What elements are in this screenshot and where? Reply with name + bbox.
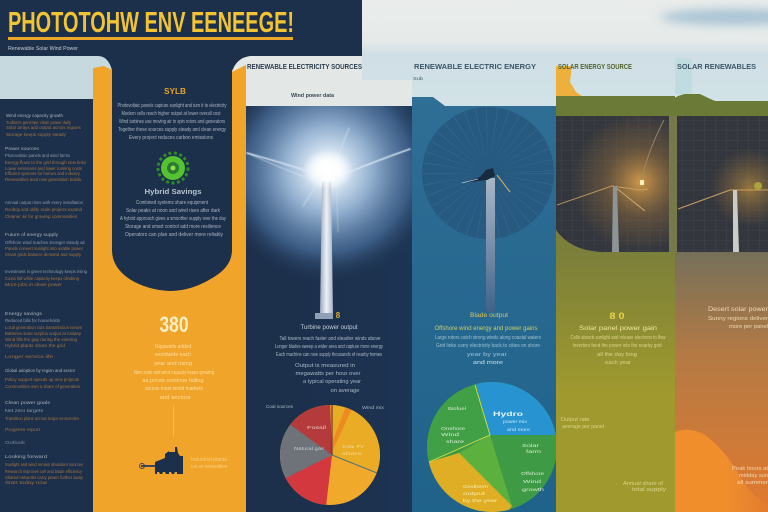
subtitle: Renewable Solar Wind Power <box>8 46 78 52</box>
pie labels <box>441 406 545 503</box>
panel: left text column: Longer service life <box>5 354 54 359</box>
panel: left text column: Energy flows to the grid through new links <box>5 160 87 165</box>
lamp <box>640 180 644 185</box>
pie labels: Wind <box>441 432 460 437</box>
panel: left text column: Photovoltaic panels and wind farms <box>5 153 71 158</box>
text block: blue panel stats <box>434 313 541 366</box>
text block: blue panel stats: Blade output <box>470 313 508 319</box>
panel: left text column: Storage keeps supply steady <box>6 132 67 137</box>
connector line <box>172 405 174 436</box>
pie labels <box>266 404 385 456</box>
text block: solar right stats: Desert solar power <box>708 307 768 313</box>
pie labels: Biofuel <box>448 406 466 411</box>
text block: statistic detail: Gigawatts added <box>155 344 191 350</box>
text block: card lower <box>120 200 226 238</box>
panel: left text column: Lower emissions and lower running costs <box>5 166 83 171</box>
panel: left text column: Turbines generate clean power daily <box>6 120 72 125</box>
text block: statistic detail <box>134 344 214 401</box>
cables <box>678 190 768 209</box>
panel: solar field <box>556 58 768 512</box>
pie labels: power mix <box>503 419 528 424</box>
text block: solar left stats: total supply <box>632 487 667 493</box>
panel: left text column: Local generation cuts transmission losses <box>5 325 83 330</box>
tower <box>486 178 495 312</box>
heading: blue panel: RENEWABLE ELECTRIC ENERGY <box>414 64 536 71</box>
panel: left text column: Energy savings <box>5 311 43 316</box>
pie labels: Geotherm <box>463 484 488 489</box>
panel: wind turbine glow <box>246 106 412 512</box>
slice: blue <box>475 380 560 435</box>
panel: left text column: Power sources <box>5 146 40 151</box>
panel: left text column: Progress report <box>5 427 41 432</box>
text block: card lower: Storage and smart control add more resilience <box>125 224 221 230</box>
panel: left text column: Batteries store surplus output at midday <box>5 331 82 336</box>
text block: statistic detail: as prices continue falling <box>142 378 204 384</box>
sky backdrop <box>362 0 768 110</box>
text block: solar right stats <box>708 307 768 486</box>
accent: orange streak <box>333 408 352 450</box>
text block: turbine stats: megawatts per hour over <box>296 371 361 377</box>
text block: card intro: Together these sources supply steady and clean energy <box>118 127 226 133</box>
rotor disc <box>422 107 554 239</box>
pie labels: by the year <box>463 498 498 503</box>
pie labels: Coal sources <box>266 404 294 409</box>
pie labels: Wind <box>523 479 542 484</box>
heading: pale header: RENEWABLE ELECTRICITY SOURCES <box>247 64 362 71</box>
subheading: blue panel: Sub <box>413 76 424 81</box>
text block: statistic detail: worldwide each <box>155 352 191 358</box>
solar array left <box>556 116 669 252</box>
text block: card lower: Solar peaks at noon and wind rises after dark <box>126 208 220 214</box>
panel: left text column <box>5 113 88 485</box>
text block: blue panel stats: year by year <box>467 352 507 358</box>
panel: left text column: Shared networks carry power further away <box>5 475 84 480</box>
text block: solar right stats: more per panel <box>729 324 768 330</box>
panel: pale header <box>232 56 412 106</box>
text block: factory caption: run on renewables <box>191 464 227 470</box>
panel: left text column: Rooftop and utility scale projects expand <box>5 207 83 212</box>
heading: solar left: SOLAR ENERGY SOURCE <box>558 64 632 71</box>
orange sky patch <box>556 66 582 96</box>
turbine tower <box>320 182 333 314</box>
panel: left text column: Efficient systems for homes and industry <box>5 171 81 176</box>
panel: left text column: Transition plans across major economies <box>5 416 80 421</box>
statistic: 380: 380 <box>160 312 188 337</box>
text block: blue panel stats: Offshore wind energy and power gains <box>434 326 538 332</box>
panel: left text column: Wind energy capacity growth <box>6 113 64 118</box>
text block: card intro: Modern cells reach higher output at lower overall cost <box>122 111 221 117</box>
panel: left text column: Solar arrays add output across regions <box>6 125 82 130</box>
slice: dark red <box>288 405 332 454</box>
text block: blue panel stats: Grid links carry electricity back to cities on shore <box>436 343 540 349</box>
pie labels: farm <box>526 449 541 454</box>
text block: card intro <box>118 103 227 141</box>
slice: grey <box>280 424 332 479</box>
panel: left text column: Panels convert sunlight into usable power <box>5 246 84 251</box>
text block: statistic detail: year and rising <box>154 361 192 367</box>
pie chart: generation share <box>420 380 560 512</box>
slice: red <box>286 455 332 505</box>
text block: turbine stats: a typical operating year <box>303 379 361 385</box>
panel: left text column: More jobs in clean power <box>5 282 63 287</box>
turbine hub glow <box>302 150 354 190</box>
orange strip corner <box>232 65 246 106</box>
text block: solar left stats: 8 0 <box>610 311 624 321</box>
text block: solar right stats: Sunny regions deliver <box>708 316 768 322</box>
text block: card intro: Every project reduces carbon emissions <box>129 135 213 141</box>
olive band <box>556 94 768 120</box>
slice: left green <box>427 384 475 462</box>
title block <box>0 0 362 57</box>
slice: yellow <box>425 453 512 512</box>
panel: left text column: Annual output rises with every installation <box>5 200 84 205</box>
text block: turbine stats: 8 <box>336 311 341 320</box>
pie labels: Onshore <box>441 426 466 431</box>
text block: card intro: Photovoltaic panels capture sunlight and turn it to electricity <box>118 103 227 109</box>
icon: factory silhouette <box>140 447 183 474</box>
tower <box>612 186 619 252</box>
pie labels: Natural gas <box>294 446 325 451</box>
heading: card lower: Hybrid Savings <box>144 189 202 196</box>
text block: solar right stats: Peak hours at <box>732 466 768 472</box>
text block: statistic detail: and sectors <box>160 395 191 401</box>
text block: turbine stats: Each machine can now supply thousands of nearby homes <box>276 352 382 358</box>
tower <box>733 190 739 252</box>
cables <box>557 120 664 211</box>
panel: navy hanging card <box>112 56 232 291</box>
title: PHOTOTOHW ENV EENEEGE! <box>8 7 294 39</box>
text block: statistic detail: New solar and wind capacity keeps growing <box>134 370 214 376</box>
text block: card lower: Operators can plan and deliver more reliably <box>125 232 223 238</box>
text block: statistic detail: across most world markets <box>145 386 203 392</box>
text block: solar left stats <box>560 311 667 493</box>
pie chart: energy mix <box>266 404 384 505</box>
text block: turbine stats: Output is measured in <box>295 363 355 369</box>
pie labels: Hydro <box>493 412 524 418</box>
panel: left text column: Wind fills the gap during the evening <box>5 337 78 342</box>
panel: left text column: Smart grids balance demand and supply <box>5 252 82 257</box>
pie labels: Solar PV <box>342 444 364 449</box>
text block: solar left stats: Annual share of <box>623 481 664 487</box>
text block: solar left stats: Inverters feed the power into the nearby grid <box>572 343 662 349</box>
pie labels: share <box>446 439 465 444</box>
panel: blue turbine <box>412 64 556 512</box>
divider post <box>669 116 677 252</box>
text block: card intro: Wind turbines use moving air to spin rotors and generators <box>119 119 225 125</box>
panel: left text column: Reduced bills for households <box>5 318 61 323</box>
text block: turbine stats: on average <box>330 388 360 394</box>
divider <box>429 385 490 462</box>
pie labels: Offshore <box>521 471 545 476</box>
panel: left text column: Renewables lead new generation builds <box>5 177 82 182</box>
orange hill <box>675 430 768 512</box>
subheading: Wind power data <box>291 93 334 99</box>
panel: left text column: Outlook <box>5 440 26 445</box>
slice: gold <box>332 405 380 470</box>
heading: solar right: SOLAR RENEWABLES <box>677 64 756 71</box>
panel: left text column: Sunlight and wind remain abundant sources <box>5 462 84 467</box>
slice: dark green <box>519 435 556 506</box>
panel: left text column: Investment in green technology keeps rising <box>5 269 88 274</box>
panel: left text column: Research improves cell and blade efficiency <box>5 469 83 474</box>
panel: left text column: Net zero targets <box>5 408 44 413</box>
text block: turbine stats <box>275 311 383 394</box>
pale marker <box>675 58 692 94</box>
heading: card: SYLB <box>164 87 186 96</box>
slice: light green <box>459 435 512 512</box>
text block: turbine stats: Turbine power output <box>300 325 358 331</box>
accent: teal divider <box>332 455 377 473</box>
panel: orange centre column <box>93 56 246 512</box>
hub and blades <box>462 168 510 192</box>
text block: blue panel stats: and more <box>473 360 503 366</box>
text block: solar left stats: average per panel <box>562 424 604 430</box>
text block: solar right stats: all summer <box>737 480 768 486</box>
solar array right <box>677 116 768 252</box>
panel: left sky header <box>0 56 112 99</box>
turbine blades <box>247 128 410 232</box>
panel: left text column: Start today now <box>5 480 48 485</box>
turbine base <box>315 313 333 319</box>
pie labels: Solar <box>522 443 540 448</box>
text block: turbine stats: Longer blades sweep a wider area and capture more energy <box>275 344 383 350</box>
panel: left text column: Hybrid plants share the grid <box>5 343 66 348</box>
text block: turbine stats: Tall towers reach faster and steadier winds above <box>280 336 381 342</box>
panel: left text column: Cleaner air for growing communities <box>5 214 78 219</box>
pie labels: Fossil <box>307 425 326 430</box>
panel: left text column: Clean power goals <box>5 400 51 405</box>
text block: card lower: A hybrid approach gives a smoother supply over the day <box>120 216 226 222</box>
pie labels: Wind mix <box>362 405 385 410</box>
text block: solar left stats: Solar panel power gain <box>579 326 657 332</box>
panel: left text column: Global adoption by region and sector <box>5 368 76 373</box>
text block: solar left stats: Cells absorb sunlight and release electrons to flow <box>570 335 666 341</box>
icon: green gear <box>158 153 188 183</box>
text block: factory caption: Industrial plants <box>191 457 228 463</box>
pie labels: output <box>463 491 486 496</box>
text block: solar left stats: all the day long <box>597 352 637 358</box>
panel: left text column: Offshore wind reaches stronger steady air <box>5 240 86 245</box>
panel: left text column: Looking forward <box>5 454 48 459</box>
lamp <box>754 182 762 190</box>
text block: card lower: Combined systems share equipment <box>136 200 209 206</box>
text block: solar left stats: each year <box>605 360 631 366</box>
panel: left text column: Future of energy supply <box>5 232 59 237</box>
pie labels: growth <box>522 487 545 492</box>
text block: solar right stats: midday sun <box>739 473 768 479</box>
panel: left text column: Communities own a share of generation <box>5 384 81 389</box>
pie labels: and more <box>507 427 531 432</box>
accent: slice edge <box>331 405 333 455</box>
panel: left text column: Policy support speeds up new projects <box>5 377 80 382</box>
text block: factory caption <box>191 457 228 470</box>
text block: solar left stats: Output rate <box>560 417 590 423</box>
text block: blue panel stats: Large rotors catch strong winds along coastal waters <box>435 335 541 341</box>
title underline <box>8 37 293 40</box>
pie labels: share <box>342 451 363 456</box>
panel: left text column: Costs fall while capacity keeps climbing <box>5 276 80 281</box>
